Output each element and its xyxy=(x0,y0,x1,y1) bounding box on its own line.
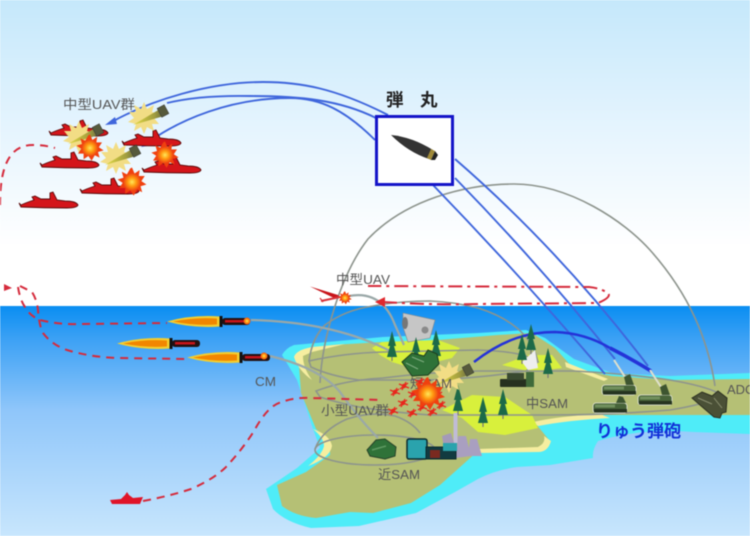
icon: shell xyxy=(391,135,438,160)
CM track upper xyxy=(251,320,392,352)
grass patch north xyxy=(372,340,460,368)
medium range SAM truck xyxy=(500,372,534,387)
CM route upper xyxy=(18,287,167,324)
label: CM: CM xyxy=(255,374,276,389)
arc to UAV C xyxy=(150,98,375,141)
radar building xyxy=(402,313,435,342)
howitzer 3 xyxy=(593,396,627,413)
UAV 2 xyxy=(122,130,181,146)
arc thin section xyxy=(474,332,610,362)
radar dish xyxy=(522,350,538,370)
tree 9 xyxy=(543,348,553,378)
small UAV swarm xyxy=(388,377,446,417)
label: howitzer: りゅう弾砲 xyxy=(596,421,681,441)
howitzer 2 xyxy=(638,370,672,405)
flame on UAV 1 xyxy=(66,129,90,138)
explosion 1 xyxy=(76,134,104,161)
beach east xyxy=(565,362,608,381)
wide range ellipse xyxy=(316,371,718,415)
arrowhead A xyxy=(105,117,117,125)
UAV dash-dot route xyxy=(368,286,609,304)
UAV intercept track xyxy=(349,295,404,345)
background: sea xyxy=(0,306,750,536)
UAV 6 xyxy=(19,192,78,208)
small UAV group xyxy=(388,378,446,417)
trajectory A xyxy=(455,159,648,366)
explosion 3 xyxy=(118,168,146,196)
close range ellipse xyxy=(315,435,435,465)
red dashed threat routes xyxy=(0,145,609,501)
short range ellipse xyxy=(309,350,538,380)
close range SAM vehicle xyxy=(367,439,396,459)
blue shell trajectories xyxy=(105,82,648,374)
tree 4 xyxy=(453,385,463,415)
arc to UAV A xyxy=(110,82,388,123)
island with shoreline xyxy=(266,330,750,528)
ADC dome xyxy=(320,184,715,386)
label: short SAM: 短SAM xyxy=(410,376,452,391)
grass patch centre xyxy=(442,395,538,435)
arrowhead: CM route xyxy=(4,284,12,291)
shell picture box xyxy=(376,116,452,184)
explosion 2 xyxy=(151,141,179,168)
background: sky xyxy=(0,0,750,307)
medium UAV swarm xyxy=(19,102,201,208)
cruise missile 1 xyxy=(167,316,250,327)
beach south xyxy=(533,414,610,426)
cruise missile 3 xyxy=(187,352,270,363)
arc thick section xyxy=(610,348,651,371)
grass patch northeast xyxy=(502,355,562,372)
CM track lower xyxy=(270,356,378,438)
label: close SAM: 近SAM xyxy=(378,467,420,482)
UAV 4 xyxy=(142,157,201,173)
heading: shell: 弾 xyxy=(386,90,404,110)
howitzer 1 xyxy=(602,360,636,395)
shell hit 3 xyxy=(100,142,141,174)
CM route lower xyxy=(20,286,187,359)
single medium UAV xyxy=(310,286,352,304)
label: medium UAV: 中型UAV xyxy=(336,272,390,287)
shell impact near short SAM xyxy=(433,361,474,393)
label: medium SAM: 中SAM xyxy=(526,396,568,411)
tree 7 xyxy=(517,334,527,364)
gray interception ranges xyxy=(309,184,718,465)
land xyxy=(277,333,750,518)
shallow water xyxy=(266,330,750,528)
shell hit 1 xyxy=(128,102,169,134)
UAV 1 xyxy=(49,120,108,136)
cruise missile 2 xyxy=(117,338,200,349)
beach southeast xyxy=(478,436,551,453)
close range dome xyxy=(315,414,420,449)
arrowhead C xyxy=(141,138,154,147)
gray missile tracks xyxy=(251,295,404,438)
shell hit 2 xyxy=(63,121,104,153)
tree 6 xyxy=(498,389,508,419)
arc to UAV B xyxy=(167,96,376,118)
short range dome xyxy=(309,301,538,362)
ADC command unit xyxy=(692,391,727,418)
tree 1 xyxy=(387,331,397,361)
label: small UAV swarm: 小型UAV群 xyxy=(321,403,389,418)
tree 8 xyxy=(526,324,536,354)
UAV 3 xyxy=(40,152,99,168)
trajectory B xyxy=(455,178,615,359)
arrowhead: route xyxy=(375,297,385,307)
UAV route xyxy=(0,145,55,205)
explosion: CM tip 1 xyxy=(244,318,250,324)
heading: shell second character: 丸 xyxy=(420,90,438,110)
tree 3 xyxy=(411,337,421,367)
explosion: small UAV xyxy=(411,377,445,410)
short range SAM vehicle xyxy=(402,350,439,376)
tree 5 xyxy=(478,397,488,427)
trajectory C xyxy=(433,185,605,374)
UAV 5 xyxy=(80,178,139,194)
warship xyxy=(110,492,143,504)
beach southwest xyxy=(308,429,332,466)
beach northwest xyxy=(294,344,345,380)
ship route xyxy=(143,398,383,501)
dark blue howitzer arc xyxy=(474,332,651,371)
explosion: CM tip 3 xyxy=(260,352,268,360)
tree 2 xyxy=(431,330,441,360)
power plant xyxy=(407,413,482,459)
trees xyxy=(387,324,553,427)
label: medium UAV swarm: 中型UAV群 xyxy=(63,97,135,112)
